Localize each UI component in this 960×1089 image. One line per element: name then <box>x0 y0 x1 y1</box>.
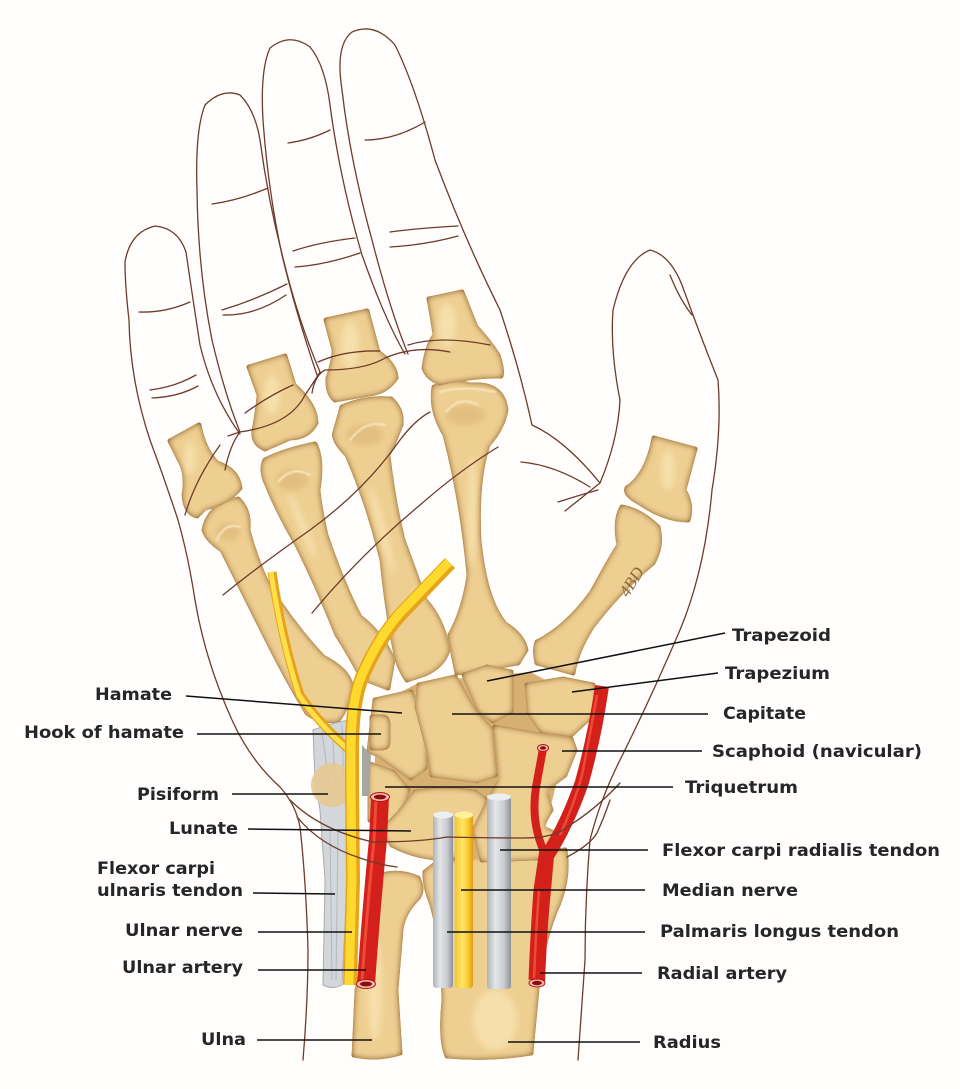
labels: left side: Ulna <box>201 1030 246 1049</box>
labels: left side: ulnaris tendon <box>97 881 243 900</box>
carpal bones <box>369 667 598 860</box>
labels: right side: Capitate <box>723 704 806 723</box>
hand outline <box>125 29 719 1060</box>
flexor carpi ulnaris tendon and pisiform <box>311 720 371 988</box>
pisiform <box>311 763 353 807</box>
ulnar artery <box>356 792 390 988</box>
labels: right side: Flexor carpi radialis tendon <box>662 841 940 860</box>
labels: right side: Median nerve <box>662 881 798 900</box>
ulna bone <box>354 873 421 1057</box>
labels: right side: Triquetrum <box>685 778 798 797</box>
labels: left side: Flexor carpi <box>97 859 215 878</box>
leader lines <box>186 633 725 1042</box>
"4BD" engraving on thumb metacarpal: 4BD <box>615 563 648 600</box>
carpal backing shadow <box>374 672 585 858</box>
labels: left side <box>24 685 246 1049</box>
labels: left side: Hamate <box>95 685 172 704</box>
labels: right side: Trapezoid <box>732 626 831 645</box>
labels: right side: Radius <box>653 1033 721 1052</box>
labels: left side: Lunate <box>169 819 238 838</box>
metacarpal and phalanx bones <box>170 292 695 721</box>
median nerve <box>455 812 473 988</box>
bone highlights <box>184 303 675 1050</box>
radius bone <box>425 850 566 1057</box>
flexor carpi radialis tendon <box>487 794 511 989</box>
labels: right side: Palmaris longus tendon <box>660 922 899 941</box>
labels: right side: Trapezium <box>725 664 830 683</box>
labels: left side: Hook of hamate <box>24 723 184 742</box>
palm creases <box>185 445 220 515</box>
labels: left side: Ulnar artery <box>122 958 243 977</box>
palmaris longus tendon <box>433 812 453 988</box>
labels: left side: Pisiform <box>137 785 219 804</box>
labels: right side: Radial artery <box>657 964 787 983</box>
forearm and hand skeleton <box>170 292 695 1057</box>
labels: right side: Scaphoid (navicular) <box>712 742 922 761</box>
labels: right side <box>653 626 940 1052</box>
ulnar nerve <box>271 562 450 985</box>
radial artery <box>529 686 602 987</box>
labels: left side: Ulnar nerve <box>125 921 243 940</box>
